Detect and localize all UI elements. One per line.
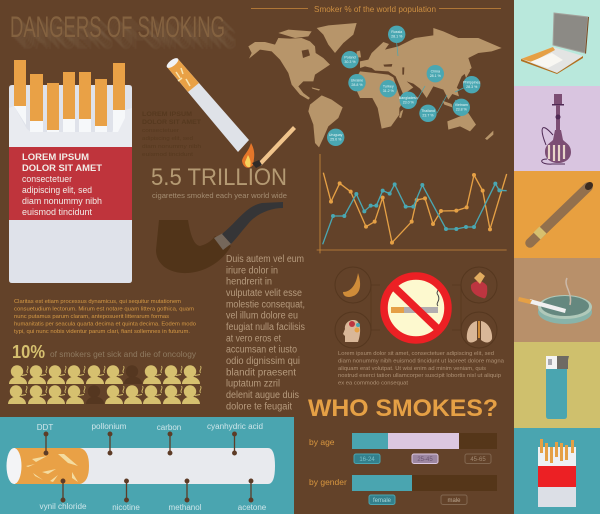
text column: accumsan et iusto <box>226 345 297 356</box>
pictogram: smokers <box>8 365 201 404</box>
map country markers: 23.8 % <box>456 108 468 112</box>
text column: vulputate velit esse <box>226 288 302 299</box>
icon: lit cigarette <box>165 56 249 152</box>
text column: feugiat nulla facilisis <box>226 322 305 333</box>
map country markers <box>327 26 481 146</box>
small orange paragraph: consuetudium lectorum. Mirum est notare quam littera gothica, quam <box>14 306 195 312</box>
icon: pipe <box>156 202 283 273</box>
text column: molestie consequat, <box>226 299 305 310</box>
text column <box>226 254 305 412</box>
text column: odio dignissim qui <box>226 356 300 367</box>
text column: at vero eros et <box>226 333 281 344</box>
text column: vel illum dolore eu <box>226 311 298 322</box>
ingredient labels: DDT <box>37 423 53 432</box>
small orange paragraph: Claritas est etiam processus dynamicus, qui sequitur mutationem <box>14 299 182 305</box>
text column: dolore te feugait <box>226 401 292 412</box>
statistic: 10 percent: of smokers get sick and die of oncology <box>50 350 197 359</box>
pack label text: diam nonummy nibh <box>22 196 102 206</box>
faded text block: diam nonummy nibh <box>142 144 201 150</box>
panel: cigarette ingredients <box>0 417 294 514</box>
panel: hookah <box>514 86 600 171</box>
ingredient labels: pollonium <box>92 422 127 431</box>
pack label text: euismod tincidunt <box>22 207 93 217</box>
pack label text <box>22 152 103 217</box>
statistic: 5.5 trillion: 5.5 TRILLION <box>151 164 287 191</box>
map country markers: 28.8 % <box>351 83 363 87</box>
map country markers: 28.1 % <box>430 74 442 78</box>
statistic: 10 percent <box>12 342 197 362</box>
faded text block: euismod tincidunt <box>142 152 193 158</box>
icon: burning match <box>242 126 296 168</box>
pack label text: LOREM IPSUM <box>22 152 89 162</box>
small orange paragraph: nunc putamus parum claram, anteposuerit litterarum formas <box>14 314 169 320</box>
pack label text: DOLOR SIT AMET <box>22 163 103 173</box>
health paragraph: Lorem ipsum dolor sit amet, consectetuer adipiscing elit, sed <box>338 351 494 357</box>
map country markers: Thailand <box>421 109 435 113</box>
chart: by gender: by gender <box>309 477 347 487</box>
map heading: Smoker % of the world population <box>314 5 436 14</box>
text column: luptatum zzril <box>226 379 280 390</box>
map country markers: 25.0 % <box>330 138 342 142</box>
faded text block: LOREM IPSUM <box>142 111 192 118</box>
ingredient labels: methanol <box>169 503 202 512</box>
text column: delenit augue duis <box>226 390 299 401</box>
small orange paragraph: typi, qui nunc nobis videntur parum clari, fiant sollemnes in futurum. <box>14 329 190 335</box>
chart: by age: by age <box>309 437 335 447</box>
cigarette pack illustration <box>9 60 132 283</box>
ingredient connectors <box>44 432 253 502</box>
map country markers: 28.1 % <box>391 34 403 38</box>
small orange paragraph: humanitatis per seacula quarta decima et quinta decima. Eodem modo <box>14 322 196 328</box>
map country markers: 23.0 % <box>403 100 415 104</box>
icon: no smoking sign <box>384 276 448 340</box>
chart: by age: 16-24 <box>359 457 375 463</box>
ingredient labels: acetone <box>238 503 267 512</box>
cigarette diagram <box>6 448 275 484</box>
map country markers: 31.2 % <box>383 89 395 93</box>
map country markers: 28.3 % <box>466 85 478 89</box>
pack label text: consectetuer <box>22 174 72 184</box>
map country markers: 30.3 % <box>344 60 356 64</box>
ingredient labels: nicotine <box>112 503 140 512</box>
text column: blandit praesent <box>226 367 296 378</box>
health paragraph: diam nonummy nibh euismod tincidunt ut laoreet dolore magna <box>338 358 505 364</box>
title: DANGERS OF SMOKING <box>10 11 225 44</box>
chart: by age: 25-45 <box>417 457 433 463</box>
health paragraph: nostrud exerci tation ullamcorper suscipit lobortis nisl ut aliquip <box>338 373 502 379</box>
heading: who smokes: WHO SMOKES? <box>308 395 498 422</box>
panel: lighter <box>514 342 600 428</box>
map country markers: Vietnam <box>455 103 468 107</box>
panel: cigarette case <box>514 0 600 86</box>
line chart <box>317 154 507 253</box>
faded text block: consectetuer <box>142 128 179 134</box>
panel: cigar <box>514 171 600 258</box>
map country markers: Ukraine <box>351 78 363 82</box>
faded text block <box>142 111 201 158</box>
statistic: 10 percent: 10% <box>12 342 45 362</box>
faded text block: adipiscing elit, sed <box>142 136 193 142</box>
chart: by gender: female <box>373 498 392 504</box>
ingredient labels <box>37 422 267 512</box>
text column: iriure dolor in <box>226 265 278 276</box>
map country markers: Poland <box>344 56 356 60</box>
map country markers: Uruguay <box>329 133 343 137</box>
health paragraph <box>338 351 505 386</box>
text column: hendrerit in <box>226 277 272 288</box>
panel: ashtray <box>514 258 600 342</box>
map country markers: Russia <box>391 30 402 34</box>
chart: by age: 45-65 <box>470 457 486 463</box>
chart: by gender: male <box>447 498 461 504</box>
ingredient labels: cyanhydric acid <box>207 422 263 431</box>
map country markers: Philippines <box>463 80 481 84</box>
statistic: 5.5 trillion: cigarettes smoked each year world wide <box>152 191 287 200</box>
world map <box>248 23 502 147</box>
small orange paragraph <box>14 299 196 335</box>
ingredient labels: carbon <box>157 423 181 432</box>
panel: cigarette pack <box>514 428 600 514</box>
map country markers: Bangladesh <box>399 96 418 100</box>
chart: by age <box>309 433 497 464</box>
map country markers: 23.7 % <box>422 114 434 118</box>
map country markers: China <box>431 70 440 74</box>
ingredient labels: vynil chloride <box>40 502 87 511</box>
text column: Duis autem vel eum <box>226 254 304 265</box>
pack label text: adipiscing elit, sed <box>22 185 92 195</box>
faded text block: DOLOR SIT AMET <box>142 119 201 126</box>
health icons <box>335 267 497 348</box>
map country markers: Turkey <box>383 84 394 88</box>
health paragraph: aliquam erat volutpat. Ut wisi enim ad minim veniam, quis <box>338 366 486 372</box>
health paragraph: ex ea commodo consequat <box>338 380 408 386</box>
chart: by gender <box>309 475 497 504</box>
